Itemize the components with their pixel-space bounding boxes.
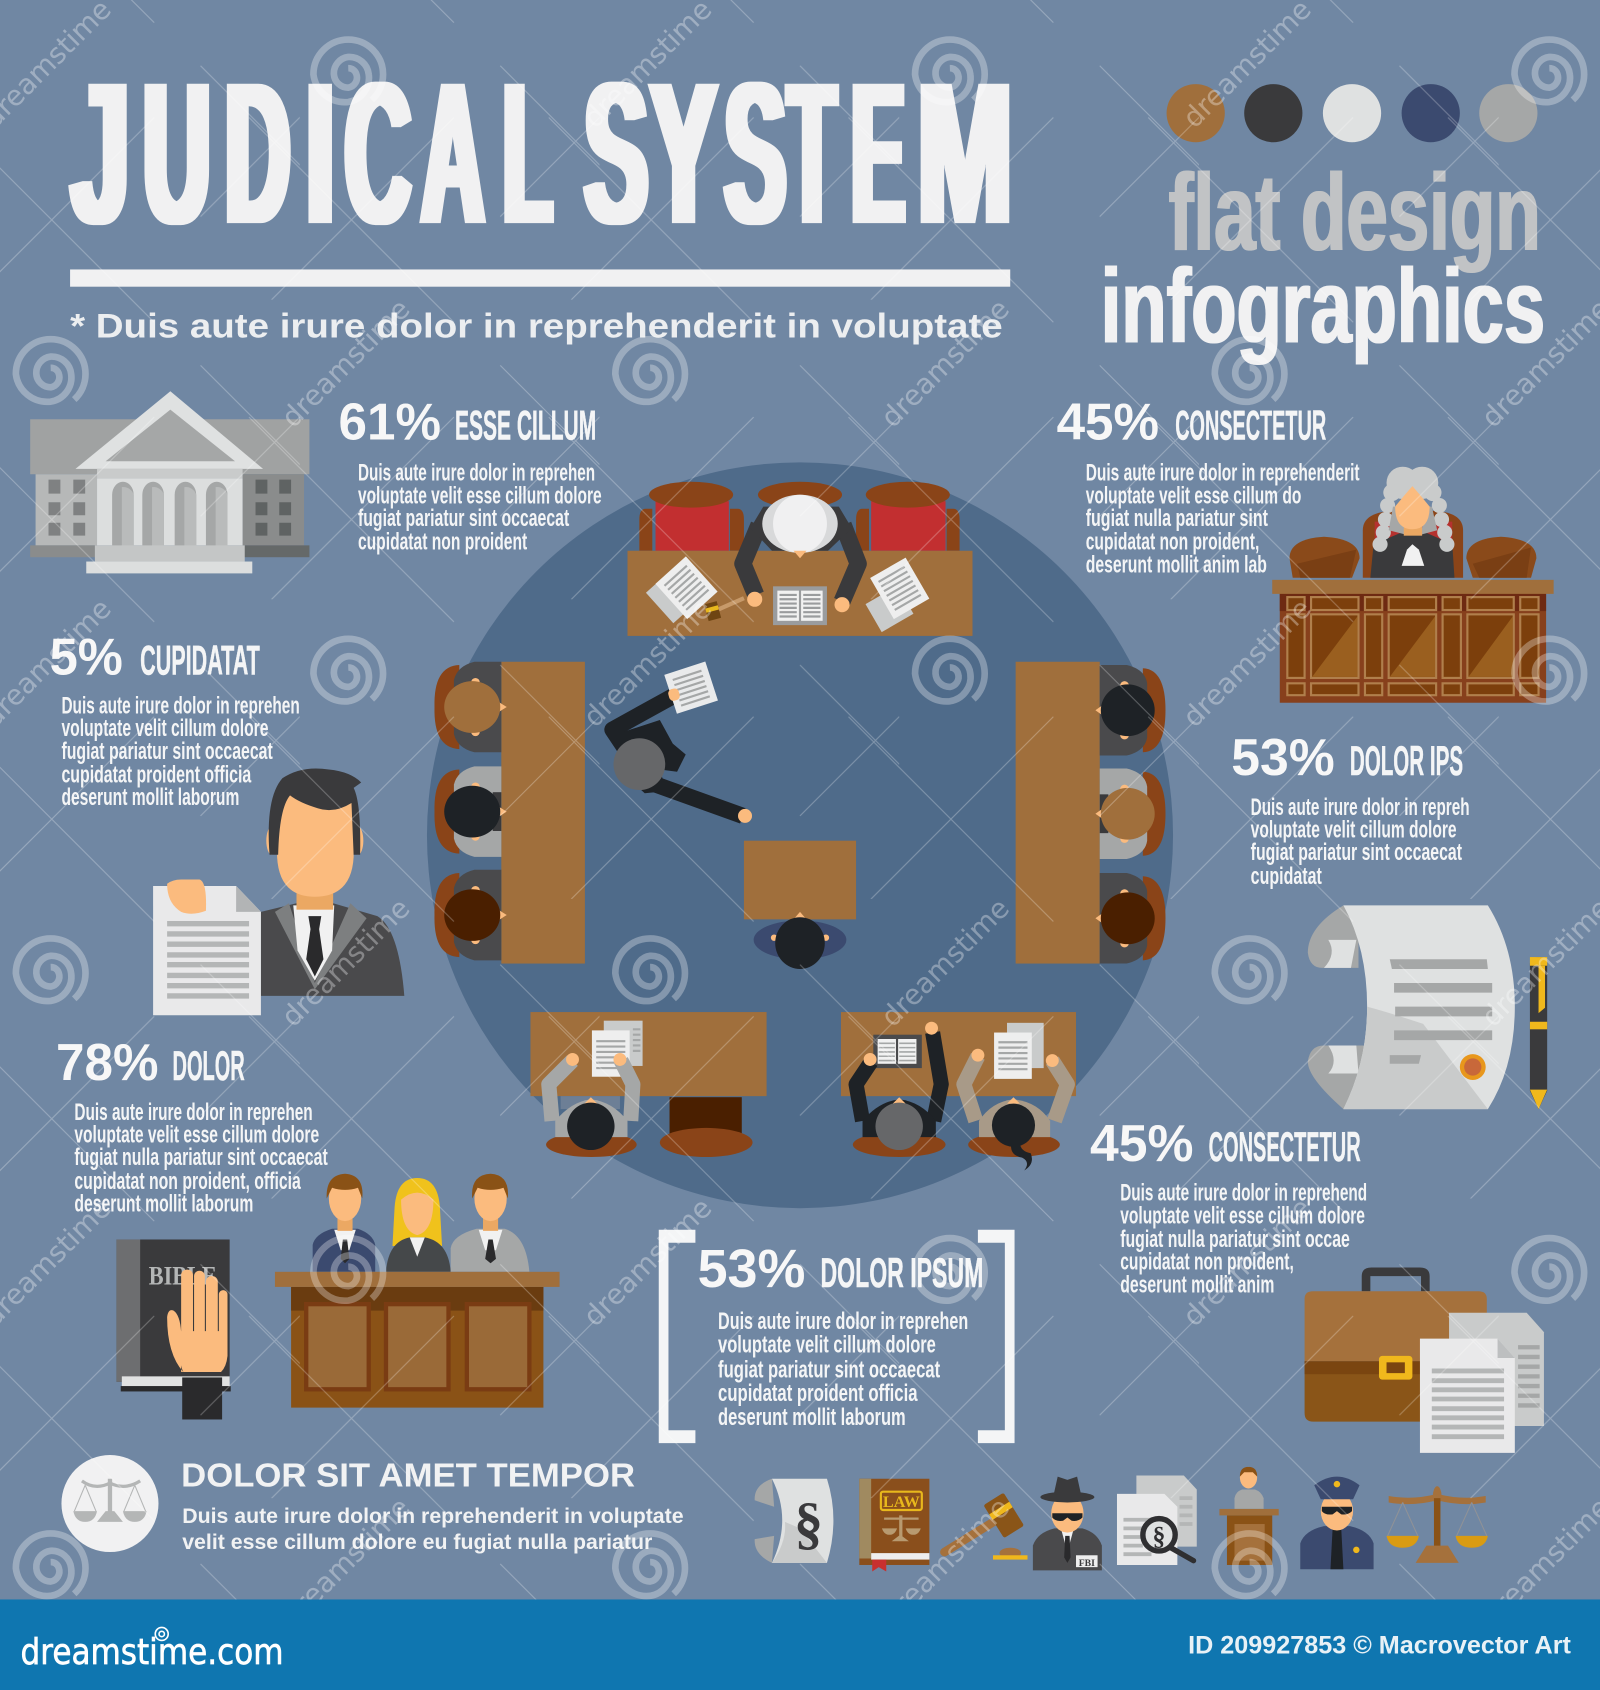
- stat: 5% cupidatat: fugiat pariatur sint occaecat: [61, 739, 273, 765]
- icon: gavel: [944, 1493, 1027, 1560]
- stat: 53% dolor ips: fugiat pariatur sint occaecat: [1251, 840, 1462, 866]
- stat box: 53% dolor ipsum with brackets: fugiat pariatur sint occaecat: [718, 1357, 940, 1383]
- stat: 5% cupidatat: CUPIDATAT: [140, 637, 260, 684]
- stat: 45% consectetur (lower): Duis aute irure dolor in reprehend: [1120, 1181, 1367, 1207]
- stat box: 53% dolor ipsum with brackets: Duis aute irure dolor in reprehen: [718, 1309, 968, 1335]
- title: S: [584, 40, 648, 266]
- logo spiral: [155, 1627, 168, 1640]
- stat: 78% dolor: deserunt mollit laborum: [74, 1191, 253, 1217]
- stat: 61% esse cillum: 61%: [339, 393, 441, 451]
- scales badge icon: [61, 1455, 158, 1552]
- watermark text: dreamstime: [874, 1491, 1016, 1632]
- icon: section scroll: §: [794, 1490, 823, 1555]
- stat box: 53% dolor ipsum with brackets: 53%: [698, 1239, 805, 1299]
- bottom right table with two seated people: [841, 1012, 1076, 1170]
- stat: 61% esse cillum: cupidatat non proident: [358, 530, 527, 556]
- image id and credit: ID 209927853 © Macrovector Art: [1188, 1632, 1571, 1659]
- stat: 61% esse cillum: voluptate velit esse cillum dolore: [358, 483, 602, 509]
- courthouse illustration: [30, 391, 309, 573]
- bottom left table with seated person and empty chair: [530, 1012, 767, 1157]
- stat: 45% consectetur (top): voluptate velit esse cillum do: [1086, 483, 1301, 509]
- stat: 78% dolor: fugiat nulla pariatur sint occaecat: [74, 1145, 328, 1171]
- stat box: 53% dolor ipsum with brackets: [659, 1230, 1015, 1443]
- title: L: [504, 40, 552, 266]
- stat: 5% cupidatat: voluptate velit cillum dolore: [61, 716, 268, 742]
- bible with hand illustration: [116, 1239, 231, 1419]
- stat: 5% cupidatat: cupidatat proident officia: [61, 762, 252, 788]
- icon: magnified documents: §: [1153, 1522, 1165, 1550]
- title: C: [345, 40, 411, 266]
- bottom heading: DOLOR SIT AMET TEMPOR: [181, 1457, 635, 1494]
- bottom description: Duis aute irure dolor in reprehenderit in voluptate: [182, 1503, 684, 1528]
- dreamstime logo text: dreamstime.com: [20, 1632, 284, 1673]
- stat: 53% dolor ips: cupidatat: [1251, 864, 1322, 890]
- stat: 5% cupidatat: deserunt mollit laborum: [61, 785, 239, 811]
- stat: 53% dolor ips: Duis aute irure dolor in repreh: [1251, 795, 1470, 821]
- stat: 45% consectetur (top): [1057, 393, 1360, 578]
- right side table with three seated people: [1016, 662, 1165, 964]
- stat: 45% consectetur (lower): cupidatat non proident,: [1120, 1250, 1294, 1276]
- scroll document illustration: [1308, 905, 1547, 1109]
- stat: 61% esse cillum: fugiat pariatur sint occaecat: [358, 506, 569, 532]
- stat: 5% cupidatat: 5%: [50, 628, 123, 686]
- stat: 78% dolor: Duis aute irure dolor in reprehen: [74, 1100, 313, 1126]
- stat: 45% consectetur (top): 45%: [1057, 393, 1159, 451]
- central courtroom floor plan: [427, 462, 1173, 1208]
- icon: detective: FBI: [1079, 1558, 1095, 1569]
- bottom description: velit esse cillum dolore eu fugiat nulla pariatur: [182, 1529, 653, 1554]
- witness stand and seated witness: [744, 841, 856, 969]
- watermark text: dreamstime: [275, 292, 416, 434]
- stat box: 53% dolor ipsum with brackets: voluptate velit cillum dolore: [718, 1333, 936, 1359]
- stat: 45% consectetur (lower): deserunt mollit anim: [1120, 1272, 1274, 1298]
- title: M: [918, 40, 1012, 266]
- icon: law book: [859, 1479, 929, 1571]
- jury box illustration: [275, 1174, 560, 1408]
- title: Y: [650, 40, 717, 266]
- judge bench top view: [627, 482, 973, 636]
- stat box: 53% dolor ipsum with brackets: deserunt mollit laborum: [718, 1405, 906, 1431]
- title: E: [852, 40, 905, 266]
- watermark text: dreamstime: [1176, 1191, 1318, 1333]
- stat: 78% dolor: voluptate velit esse cillum dolore: [74, 1122, 319, 1148]
- stat: 53% dolor ips: [1231, 728, 1470, 890]
- icon: police officer: [1300, 1477, 1374, 1569]
- icon: section scroll: [755, 1479, 833, 1563]
- title: U: [143, 40, 210, 266]
- stat: 78% dolor: [56, 1033, 328, 1217]
- footer bar: [0, 1599, 1600, 1690]
- stat: 61% esse cillum: Duis aute irure dolor in reprehen: [358, 461, 595, 487]
- briefcase with documents illustration: [1305, 1268, 1544, 1453]
- lawyer holding document illustration: [153, 768, 404, 1015]
- left side table with three seated people: [434, 662, 585, 964]
- title: S: [725, 40, 786, 266]
- stat: 78% dolor: 78%: [56, 1033, 158, 1091]
- left bracket: [659, 1230, 695, 1443]
- title: J: [71, 40, 129, 266]
- stat: 78% dolor: DOLOR: [173, 1042, 245, 1089]
- stat: 53% dolor ips: DOLOR IPS: [1350, 737, 1463, 784]
- title underline: [70, 269, 1010, 287]
- stat: 61% esse cillum: ESSE CILLUM: [455, 402, 596, 449]
- judge at bench illustration: [1272, 467, 1554, 703]
- stat: 45% consectetur (lower): fugiat nulla pariatur sint occae: [1120, 1227, 1350, 1253]
- icon: law book: LAW: [883, 1494, 920, 1511]
- watermark text: dreamstime: [874, 892, 1016, 1033]
- stat: 45% consectetur (top): Duis aute irure dolor in reprehenderit: [1086, 461, 1360, 487]
- bottom description: [182, 1503, 684, 1554]
- stat box: 53% dolor ipsum with brackets: DOLOR IPSUM: [820, 1249, 983, 1296]
- watermark text: dreamstime: [577, 592, 718, 734]
- stat: 45% consectetur (top): CONSECTETUR: [1175, 402, 1326, 449]
- icon: detective: [1033, 1477, 1102, 1570]
- icon: scales of justice: [1387, 1486, 1488, 1563]
- text: CONSECTETUR: [1209, 1123, 1361, 1170]
- watermark text: dreamstime: [1176, 592, 1318, 734]
- stat: 61% esse cillum: [339, 393, 602, 556]
- stat: 45% consectetur (top): cupidatat non proident,: [1086, 530, 1259, 556]
- stat: 45% consectetur (lower): voluptate velit esse cillum dolore: [1120, 1203, 1365, 1229]
- title: I: [306, 40, 334, 266]
- icon: witness at podium: [1219, 1467, 1279, 1565]
- stat: 45% consectetur (lower): [1090, 1114, 1367, 1298]
- watermark text: dreamstime: [275, 1491, 416, 1632]
- colour palette dots: [1167, 84, 1537, 142]
- right bracket: [978, 1230, 1015, 1443]
- watermark text: dreamstime: [577, 1191, 718, 1333]
- stat: 78% dolor: cupidatat non proident, officia: [74, 1169, 301, 1195]
- watermark text: dreamstime: [874, 292, 1016, 434]
- stat: 45% consectetur (top): deserunt mollit anim lab: [1086, 552, 1267, 578]
- stat: 45% consectetur (lower): 45%: [1090, 1114, 1194, 1172]
- title: D: [225, 40, 290, 266]
- stat: 53% dolor ips: voluptate velit cillum dolore: [1251, 817, 1457, 843]
- watermark text: dreamstime: [275, 892, 416, 1033]
- stat: 45% consectetur (top): fugiat nulla pariatur sint: [1086, 506, 1268, 532]
- stat: 5% cupidatat: [50, 628, 300, 811]
- subtitle: * Duis aute irure dolor in reprehenderit in voluptate: [70, 307, 1003, 345]
- stat: 53% dolor ips: 53%: [1231, 728, 1335, 786]
- title: T: [788, 40, 836, 266]
- bible with hand illustration: BIBLE: [149, 1262, 217, 1291]
- stat: 5% cupidatat: Duis aute irure dolor in reprehen: [61, 694, 300, 720]
- title: A: [422, 40, 484, 266]
- standing lawyer top view: [612, 662, 752, 823]
- icon: magnified documents: [1117, 1476, 1197, 1565]
- stat box: 53% dolor ipsum with brackets: cupidatat proident officia: [718, 1381, 918, 1407]
